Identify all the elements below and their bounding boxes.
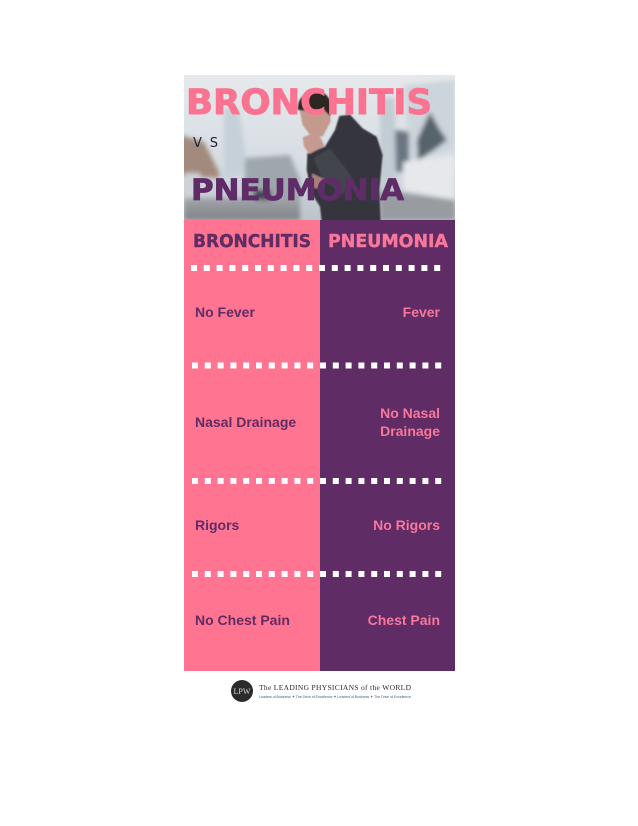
divider: dotted row 4: [192, 571, 441, 577]
text: No Nasal Drainage: Drainage: [380, 423, 440, 439]
photo: man coughing on a street: [180, 75, 455, 222]
text: No Nasal Drainage: No Nasal: [380, 405, 440, 421]
divider: dotted row 2: [192, 362, 441, 368]
text: Nasal Drainage: Nasal Drainage: [195, 414, 296, 430]
logo tagline: Leaders of Business ✦ The Drive of Excellence ✦ Leaders of Business ✦ The Drive of Excellence: [259, 695, 411, 699]
man's hair: [298, 92, 332, 116]
heading: PNEUMONIA: PNEUMONIA: [328, 232, 448, 252]
panel: pneumonia column: [320, 220, 455, 671]
man's face: [299, 107, 331, 137]
panel: bronchitis column: [184, 220, 320, 671]
text: No Fever: No Fever: [195, 304, 255, 320]
icon: LPW emblem: LPW: [234, 687, 251, 696]
text: No Rigors: No Rigors: [373, 517, 440, 533]
text: Fever: Fever: [403, 304, 441, 320]
text: Chest Pain: Chest Pain: [368, 612, 440, 628]
title: BRONCHITIS: BRONCHITIS: [186, 83, 432, 123]
title: PNEUMONIA: PNEUMONIA: [191, 173, 405, 207]
heading: BRONCHITIS: BRONCHITIS: [193, 232, 311, 252]
title: vs: V S: [193, 136, 218, 151]
divider: dotted row 3: [192, 478, 441, 484]
text: Rigors: Rigors: [195, 517, 240, 533]
divider: dotted row 1: [191, 265, 440, 271]
logo name: The LEADING PHYSICIANS of the WORLD: [259, 683, 412, 692]
icon: LPW emblem: [231, 680, 253, 702]
man's hand: [303, 132, 325, 154]
logo: The Leading Physicians of the World: [231, 680, 412, 702]
text: No Chest Pain: No Chest Pain: [195, 612, 290, 628]
man's coat: [307, 115, 383, 222]
